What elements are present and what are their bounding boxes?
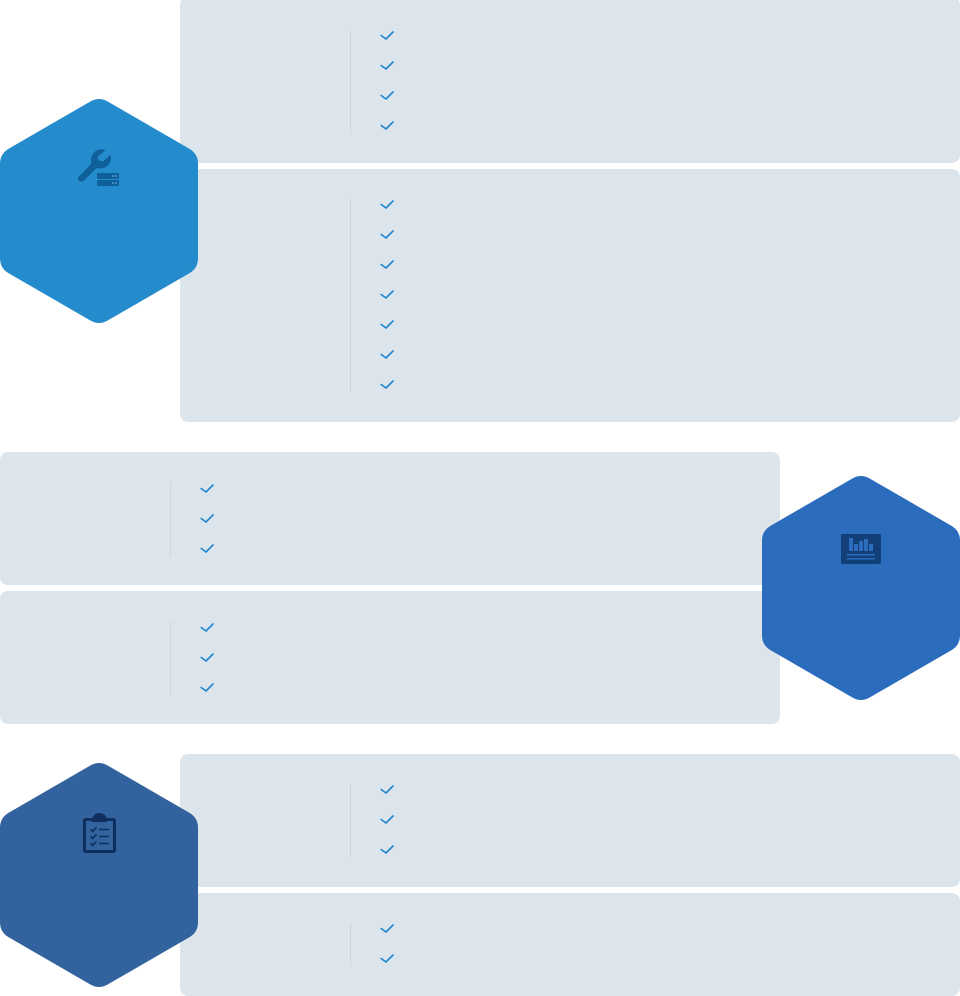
panel: middle section one (0, 452, 780, 585)
panel: middle section two (0, 591, 780, 724)
checklist: panel two (381, 201, 393, 388)
panel: bottom section one (180, 754, 960, 887)
checklist: panel four (201, 624, 213, 691)
checklist: panel one (381, 32, 393, 129)
checklist: panel five (381, 786, 393, 853)
icon: clipboard checklist (84, 813, 114, 852)
panel: top section two (180, 169, 960, 422)
panel: top section one (180, 0, 960, 163)
hexagon: chart badge (762, 476, 960, 700)
hexagon: checklist badge (0, 763, 198, 987)
icon: wrench and server (78, 149, 119, 186)
checklist: panel three (201, 485, 213, 552)
checklist: panel six (381, 925, 393, 962)
icon: bar chart screen (841, 534, 881, 564)
panel: bottom section two (180, 893, 960, 996)
hexagon: tools badge (0, 99, 198, 323)
